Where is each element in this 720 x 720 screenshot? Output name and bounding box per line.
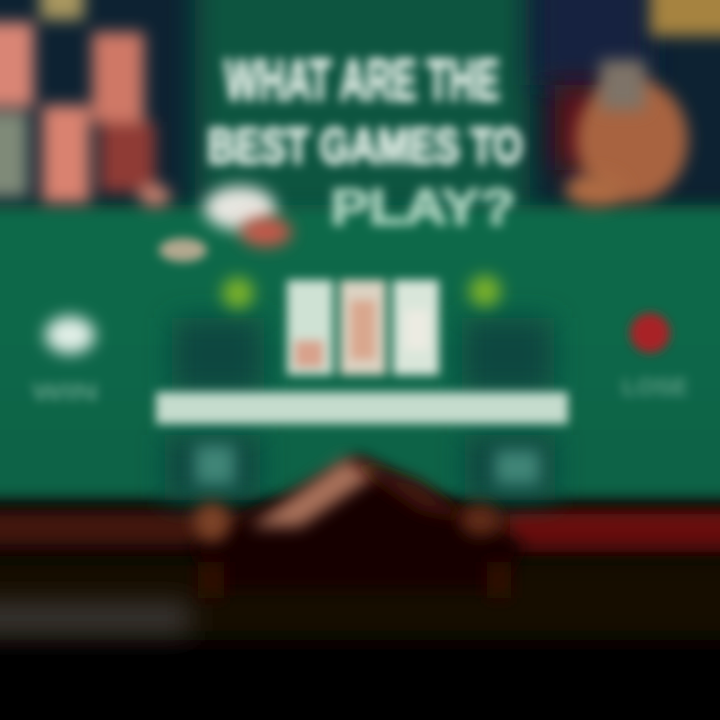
- left icon and label: WIN: [32, 379, 98, 406]
- chips on table: [159, 186, 292, 262]
- title: BEST GAMES TO: [208, 118, 522, 174]
- green markers: [222, 275, 501, 309]
- central dark hands silhouette: [190, 455, 525, 598]
- left icon and label: [32, 316, 98, 406]
- background: top band and felt table: [0, 0, 720, 500]
- playing cards: [287, 280, 439, 375]
- title: WHAT ARE THE: [224, 48, 500, 113]
- title: [208, 48, 522, 235]
- title: PLAY?: [330, 179, 516, 235]
- hand, top right: [535, 0, 720, 207]
- dark bet columns: [165, 318, 555, 500]
- right icon and label: [622, 313, 688, 401]
- table edge and floor: [0, 510, 720, 640]
- wide light bar: [156, 392, 568, 424]
- right icon and label: LOSE: [622, 374, 688, 401]
- stacks of chips, top left: [0, 0, 171, 207]
- lower column labels: [195, 445, 540, 485]
